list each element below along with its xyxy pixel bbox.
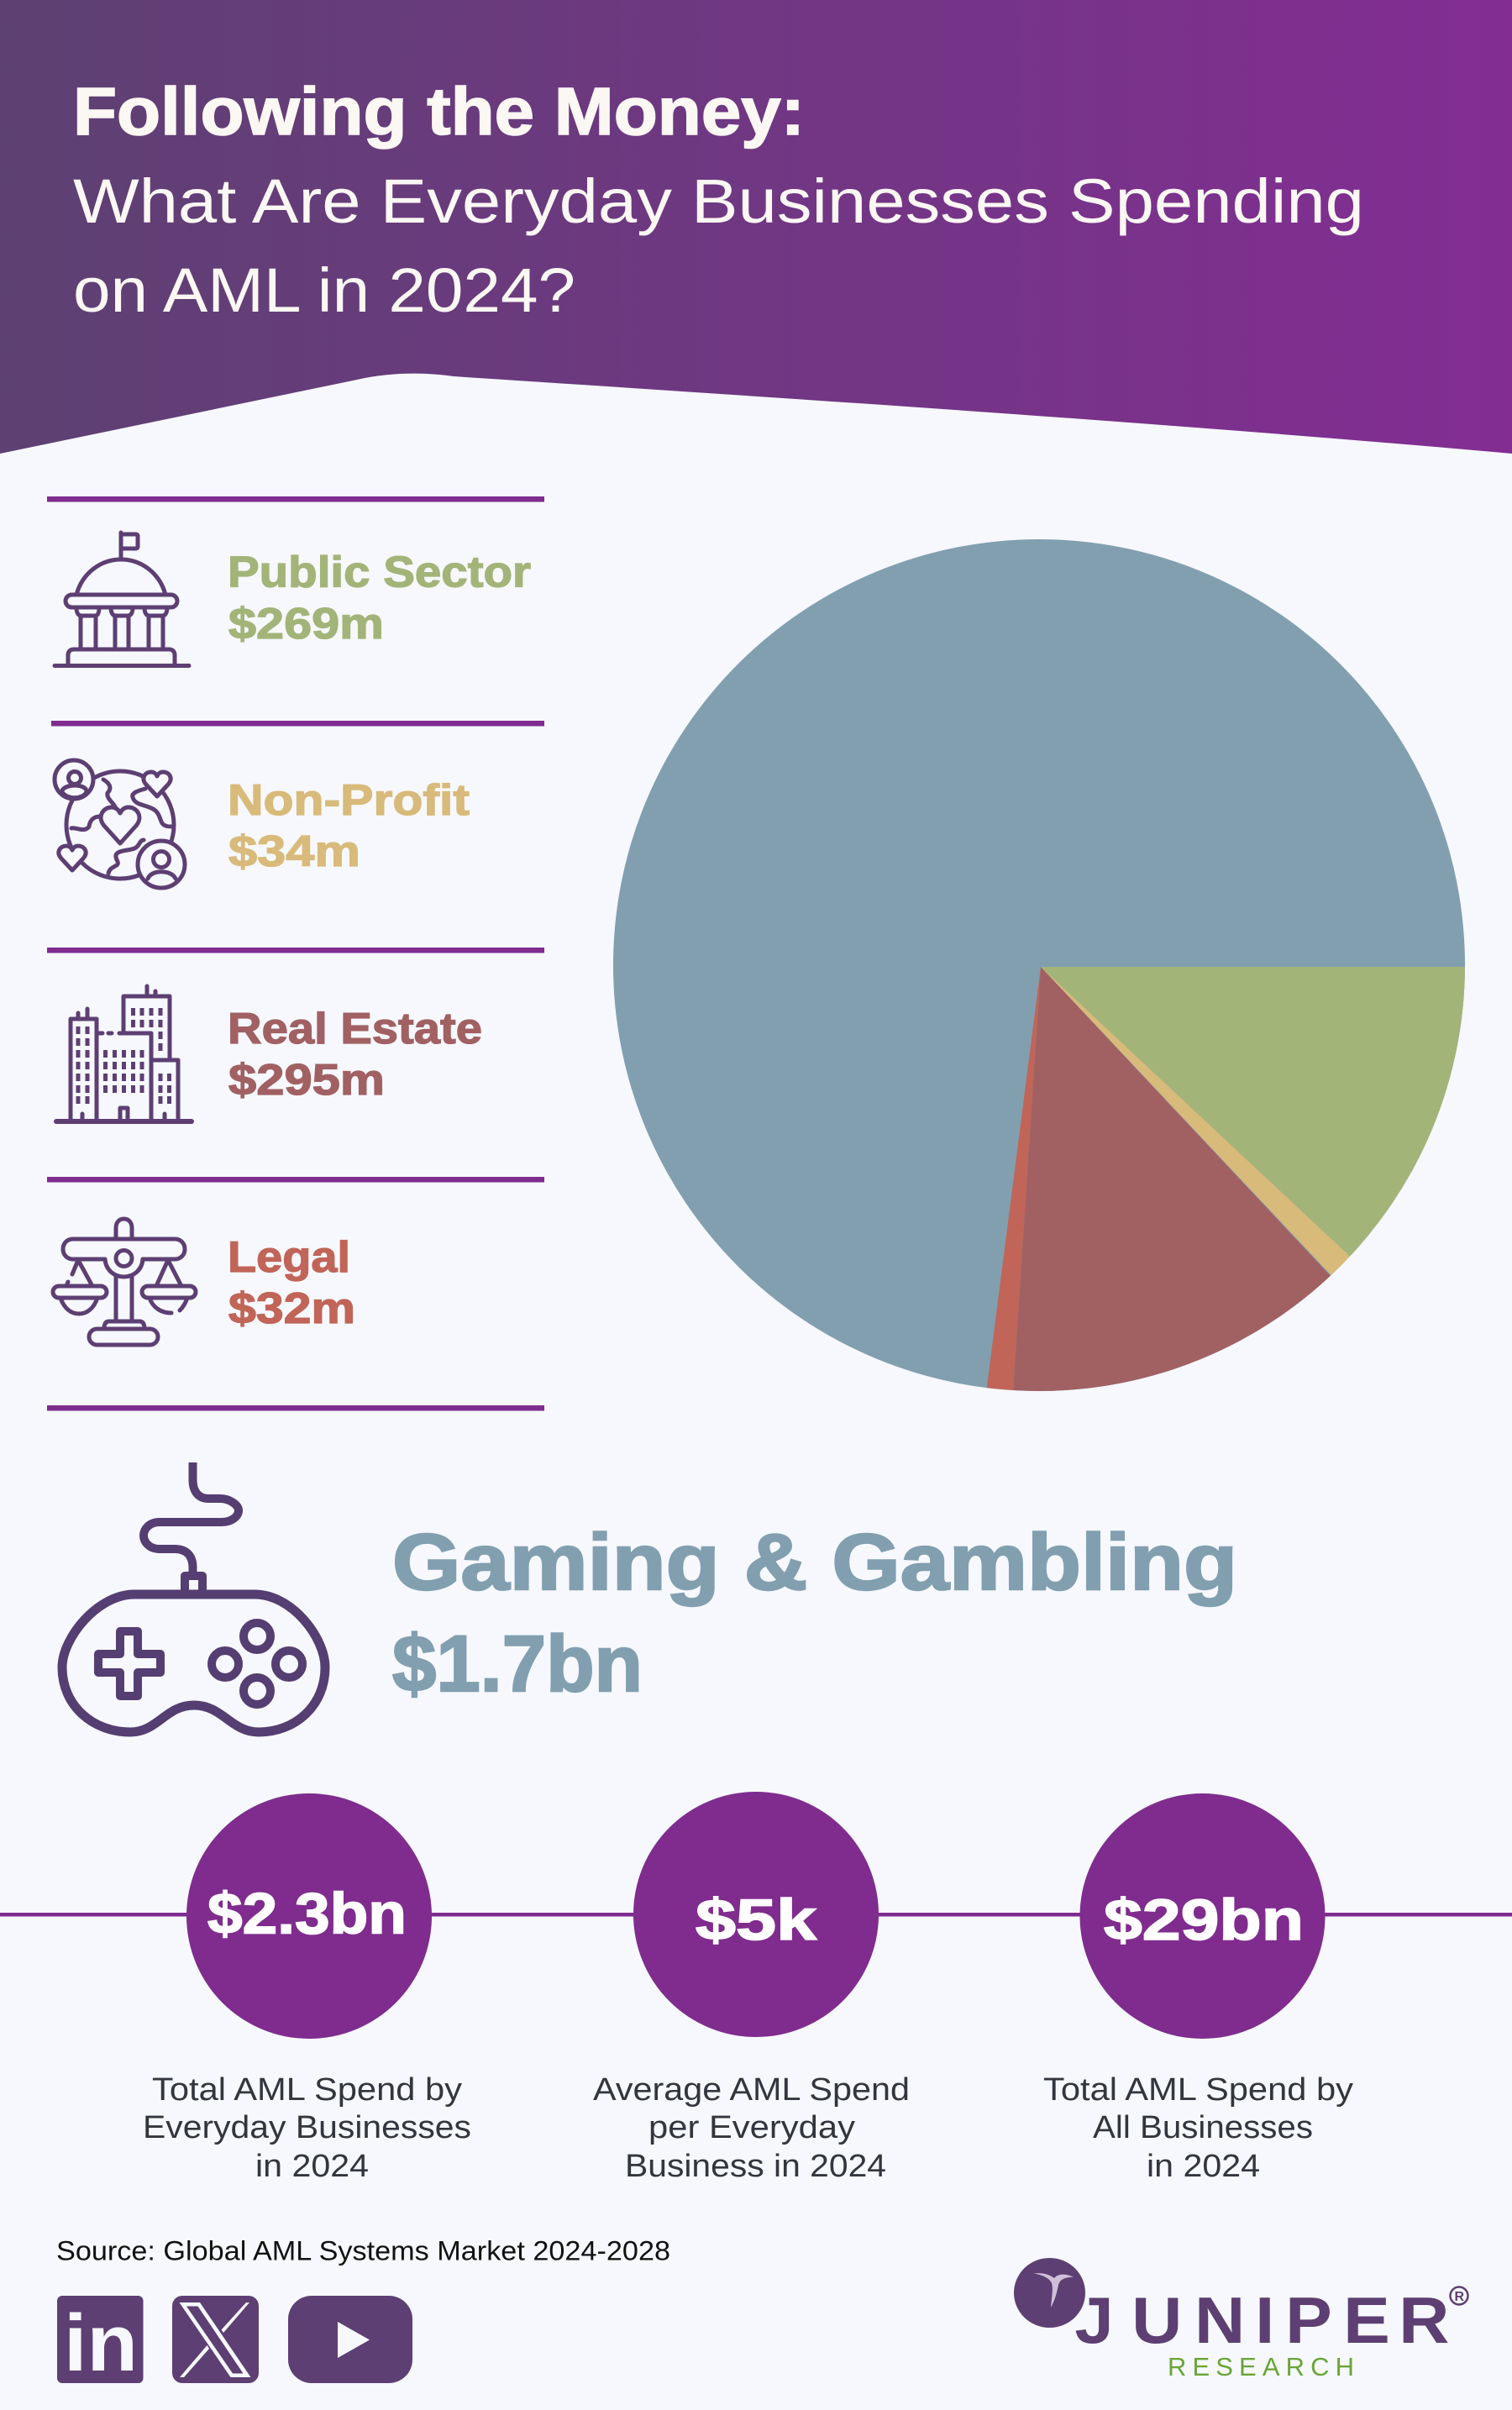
slice: legal: [986, 968, 1041, 1390]
stat: average spend: [593, 1792, 910, 2184]
caption: Average AML Spend: [593, 2072, 910, 2108]
logo: juniper research: [1014, 2258, 1468, 2381]
caption: [143, 2072, 471, 2184]
slice: non-profit: [1041, 967, 1361, 1275]
icon: scales of justice: [53, 1219, 196, 1345]
label: real estate: [228, 1005, 482, 1105]
stat: average spend: $5k: [696, 1888, 817, 1952]
caption: in 2024: [255, 2149, 369, 2184]
label: gaming and gambling: Gaming & Gambling: [392, 1518, 1237, 1607]
label: gaming and gambling: $1.7bn: [392, 1620, 643, 1709]
icon: linkedin: in: [64, 2298, 138, 2388]
icon: game controller: [62, 1462, 325, 1732]
subtitle line 2: on AML in 2024?: [73, 255, 575, 325]
caption: in 2024: [1147, 2149, 1260, 2184]
label: non-profit: Non-Profit: [228, 776, 470, 825]
caption: Everyday Businesses: [143, 2110, 471, 2145]
icon: globe with hearts and people: [55, 760, 185, 888]
label: non-profit: [228, 776, 470, 876]
icon: youtube: [288, 2296, 412, 2383]
label: legal: Legal: [228, 1233, 350, 1282]
label: legal: $32m: [228, 1284, 355, 1333]
slice: public sector: [1041, 967, 1504, 1256]
logo: juniper research: RESEARCH: [1168, 2352, 1354, 2381]
caption: Total AML Spend by: [1043, 2072, 1353, 2108]
source note: Source: Global AML Systems Market 2024-2028: [56, 2236, 670, 2266]
header banner: [0, 0, 1512, 454]
slice: gaming and gambling: [613, 539, 1465, 1391]
caption: [1043, 2072, 1353, 2184]
label: gaming and gambling: [392, 1518, 1237, 1709]
label: public sector: [228, 548, 531, 648]
pie chart: [613, 539, 1504, 1428]
icon: x: [172, 2296, 259, 2383]
stat: total all businesses spend: [1043, 1793, 1353, 2184]
stat: total everyday spend: $2.3bn: [207, 1882, 407, 1945]
stat: total everyday spend: [143, 1793, 471, 2184]
caption: Business in 2024: [625, 2149, 886, 2184]
caption: All Businesses: [1093, 2110, 1313, 2145]
label: public sector: $269m: [228, 600, 384, 648]
label: legal: [228, 1233, 355, 1333]
stat: total all businesses spend: $29bn: [1104, 1888, 1304, 1952]
icon: government building: [55, 533, 189, 665]
label: public sector: Public Sector: [228, 548, 531, 596]
logo: juniper research: JUNIPER: [1074, 2284, 1449, 2357]
caption: per Everyday: [648, 2110, 855, 2145]
label: non-profit: $34m: [228, 827, 360, 876]
caption: [593, 2072, 910, 2184]
registered mark: [1450, 2287, 1468, 2305]
title: Following the Money:: [73, 74, 805, 149]
slice: real estate: [1013, 967, 1331, 1391]
label: real estate: Real Estate: [228, 1005, 482, 1053]
icon: city buildings: [56, 986, 192, 1121]
registered mark: R: [1455, 2290, 1465, 2304]
subtitle line 1: What Are Everyday Businesses Spending: [73, 166, 1364, 236]
caption: Total AML Spend by: [152, 2072, 462, 2108]
label: real estate: $295m: [228, 1056, 385, 1105]
